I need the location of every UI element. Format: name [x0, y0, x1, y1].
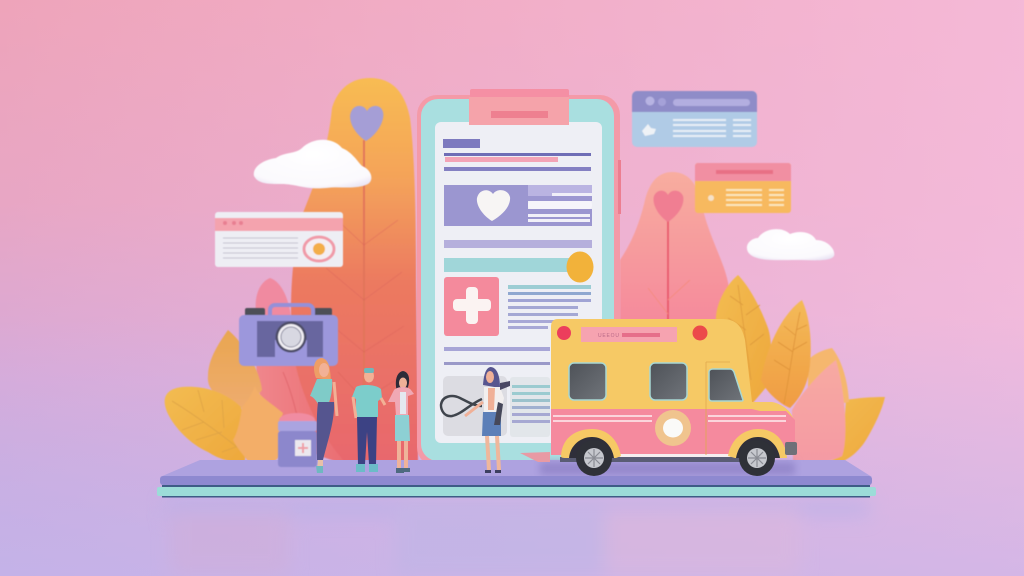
pink hill leaf: [620, 172, 731, 322]
rear wheel: [576, 440, 612, 476]
person: medic in teal scrubs: [352, 368, 385, 472]
tall orange leaf: [291, 78, 418, 462]
round emblem: [655, 410, 691, 446]
teal lines block: [510, 377, 550, 437]
peach leaf: [233, 386, 283, 464]
platform: [157, 460, 876, 498]
stethoscope: [441, 396, 482, 416]
pink heart: [654, 191, 683, 222]
cab door seam: [706, 362, 730, 455]
orange feather leaf: [761, 300, 811, 408]
ambulance windows: [569, 363, 743, 401]
right cloud: [747, 229, 834, 260]
clip: [469, 89, 569, 125]
yellow knob: [566, 252, 594, 282]
purple info card: [632, 91, 757, 147]
white sill: [620, 454, 730, 457]
floor reflection: [165, 498, 870, 576]
person: woman in pink jacket: [388, 371, 414, 473]
platform top surface: [160, 460, 872, 477]
tall yellow leaf: [716, 275, 771, 404]
ambulance roof sign: [581, 327, 677, 342]
teal bar: [444, 258, 572, 272]
platform purple edge: [160, 476, 872, 485]
white heart: [477, 190, 510, 221]
platform bottom shadow: [162, 496, 870, 498]
ambulance roof sign: UEEOU: [598, 333, 620, 339]
yellow far right leaf: [820, 397, 885, 465]
coral leaf lower left: [256, 278, 400, 462]
bumper: [785, 442, 797, 455]
phone clipboard: [417, 89, 621, 467]
paper sheet: [435, 122, 602, 443]
ambulance: [520, 319, 797, 476]
ambulance step: [520, 452, 550, 462]
pink eye card: [215, 212, 343, 267]
siren lights: [557, 326, 708, 340]
right foliage: [716, 275, 885, 465]
orange back leaf: [208, 330, 262, 410]
platform gap: [162, 485, 870, 487]
text lines beside plus: [508, 285, 591, 329]
pale orange back leaf: [808, 348, 849, 410]
ambulance stripes: [553, 416, 786, 421]
yellow round leaf: [165, 387, 245, 463]
person: woman in teal: [310, 358, 337, 473]
lavender bar: [444, 240, 592, 248]
ambulance yellow body: [551, 319, 794, 420]
dark underside: [560, 457, 750, 462]
mid text lines: [444, 347, 550, 365]
platform teal base: [157, 487, 876, 496]
camera: [239, 305, 338, 366]
phone frame: [417, 95, 620, 467]
pink leaf: [792, 360, 845, 463]
wheel arches: [561, 429, 787, 458]
left foliage: [165, 330, 283, 464]
orange info card: [695, 163, 791, 213]
plus tile: [444, 277, 499, 336]
front wheel: [739, 440, 775, 476]
person: woman with stethoscope: [465, 367, 510, 473]
heart card: [444, 185, 592, 226]
left cloud: [254, 140, 371, 188]
medicine jar: [278, 413, 317, 467]
phone teal screen: [421, 99, 614, 461]
side button: [618, 160, 621, 214]
purple heart: [350, 106, 383, 141]
paper header lines: [443, 139, 591, 171]
platform shadow under vehicle: [540, 462, 795, 475]
grey document block: [443, 376, 507, 436]
ambulance pink lower body: [551, 409, 795, 455]
